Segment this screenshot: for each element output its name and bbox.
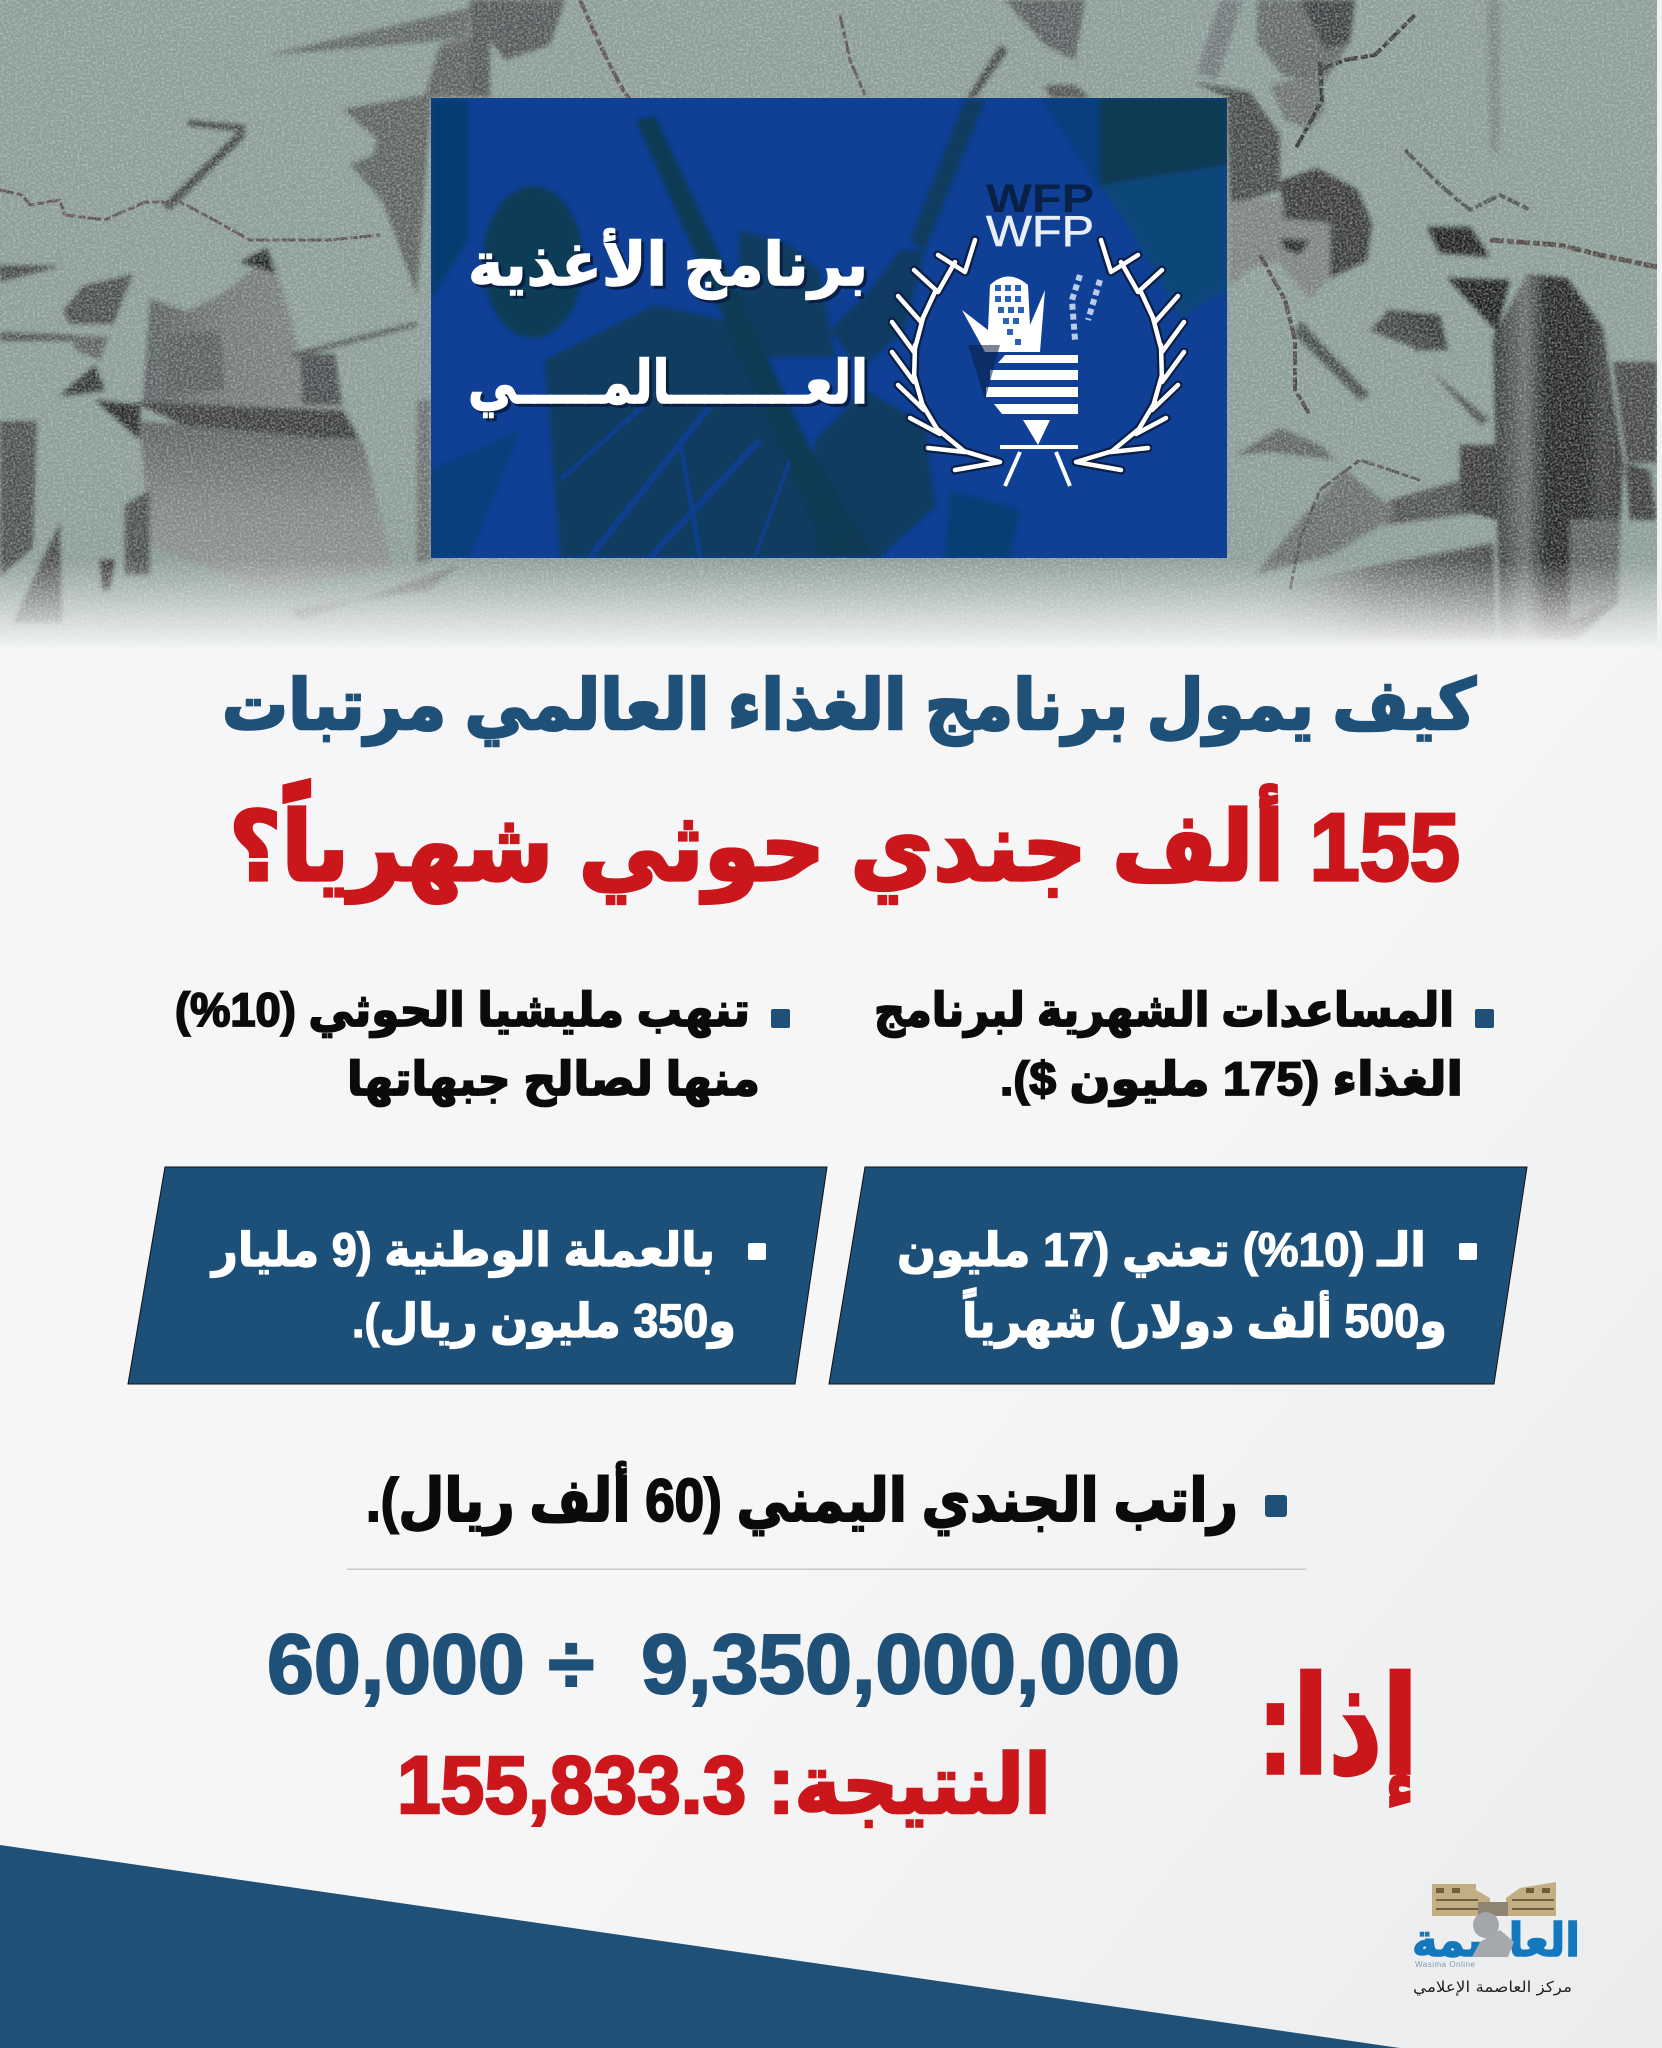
right figures bbox=[1257, 0, 1350, 84]
shirt bbox=[143, 250, 343, 408]
lower fade to white bbox=[0, 560, 1662, 650]
item: militia looting: تنهب مليشيا الحوثي (10%) bbox=[175, 983, 750, 1038]
panel heading: برنامج الأغذية العالمي: العــــــــالمـــــي bbox=[468, 349, 868, 418]
WFP blue panel bbox=[431, 98, 1227, 558]
right wreath bbox=[1076, 240, 1184, 470]
logo wordmark: العاصمة bbox=[1412, 1914, 1580, 1966]
heading: إذا: إذا: bbox=[1258, 1651, 1418, 1806]
logo tagline latin: Wasima Online bbox=[1415, 1960, 1475, 1969]
corn and stripes bbox=[962, 276, 1045, 352]
lower-left dark areas bbox=[0, 421, 37, 577]
WFP emblem: WFP bbox=[986, 207, 1094, 256]
noise texture bbox=[0, 0, 1662, 650]
panel: amount in riyals: و350 مليون ريال). bbox=[352, 1294, 736, 1349]
WFP emblem bbox=[892, 177, 1184, 486]
globe bbox=[1473, 1912, 1499, 1938]
panel: amount in riyals bbox=[128, 1167, 827, 1384]
title line 1: كيف يمول برنامج الغذاء العالمي مرتبات bbox=[222, 666, 1476, 746]
panel: 10 percent in dollars: الـ (10%) تعني (17 مليون bbox=[897, 1223, 1426, 1278]
left wreath bbox=[892, 240, 1000, 470]
bottom blue wedge bbox=[0, 1845, 1400, 2048]
WFP emblem: WFP bbox=[986, 177, 1094, 221]
wheel bbox=[1493, 274, 1623, 640]
belly bbox=[140, 421, 393, 590]
vehicle bbox=[1427, 227, 1490, 257]
cloth shading bbox=[1235, 428, 1335, 460]
panel: amount in riyals: بالعملة الوطنية (9 مليار bbox=[210, 1223, 715, 1278]
item: monthly aid: الغذاء (175 مليون $). bbox=[1000, 1052, 1463, 1107]
calculation: result: النتيجة: 155,833.3 bbox=[397, 1740, 1051, 1831]
panel heading: برنامج الأغذية العالمي: العــــــــالمـــــي bbox=[471, 352, 871, 421]
logo caption: مركز العاصمة الإعلامي bbox=[1413, 1978, 1572, 1997]
title line 2: 155 ألف جندي حوثي شهرياً؟ bbox=[229, 779, 1460, 904]
item: soldier salary: راتب الجندي اليمني (60 ألف ريال). bbox=[366, 1461, 1238, 1536]
photograph cracks bbox=[0, 0, 1662, 590]
item: militia looting: منها لصالح جبهاتها bbox=[347, 1052, 760, 1107]
item: monthly aid bbox=[874, 983, 1494, 1107]
item: monthly aid: المساعدات الشهرية لبرنامج bbox=[874, 983, 1454, 1038]
panel heading: برنامج الأغذية العالمي bbox=[468, 228, 871, 421]
panel heading: برنامج الأغذية العالمي: برنامج الأغذية bbox=[471, 231, 871, 303]
blue streaks over fighters bbox=[560, 400, 790, 557]
panel heading: برنامج الأغذية العالمي: برنامج الأغذية bbox=[468, 228, 868, 300]
panel: 10 percent in dollars: و500 ألف دولار) شهرياً bbox=[962, 1288, 1447, 1349]
hero photograph of fighters bbox=[0, 0, 1662, 650]
calculation: division: 60,000 ÷ 9,350,000,000 bbox=[267, 1617, 1180, 1711]
fighters tinted inside the panel bbox=[431, 98, 1227, 557]
wreath ribbon bbox=[1000, 447, 1078, 486]
panel: 10 percent in dollars bbox=[829, 1167, 1527, 1384]
logo: Al-Asima media center bbox=[1412, 1882, 1580, 1997]
castle illustration bbox=[1432, 1882, 1556, 1916]
left man's coat shadows bbox=[267, 8, 470, 55]
cap and small figure bbox=[63, 274, 133, 324]
belt band bbox=[133, 402, 360, 440]
item: militia looting bbox=[175, 983, 790, 1107]
centre top figure bbox=[1005, 0, 1085, 60]
